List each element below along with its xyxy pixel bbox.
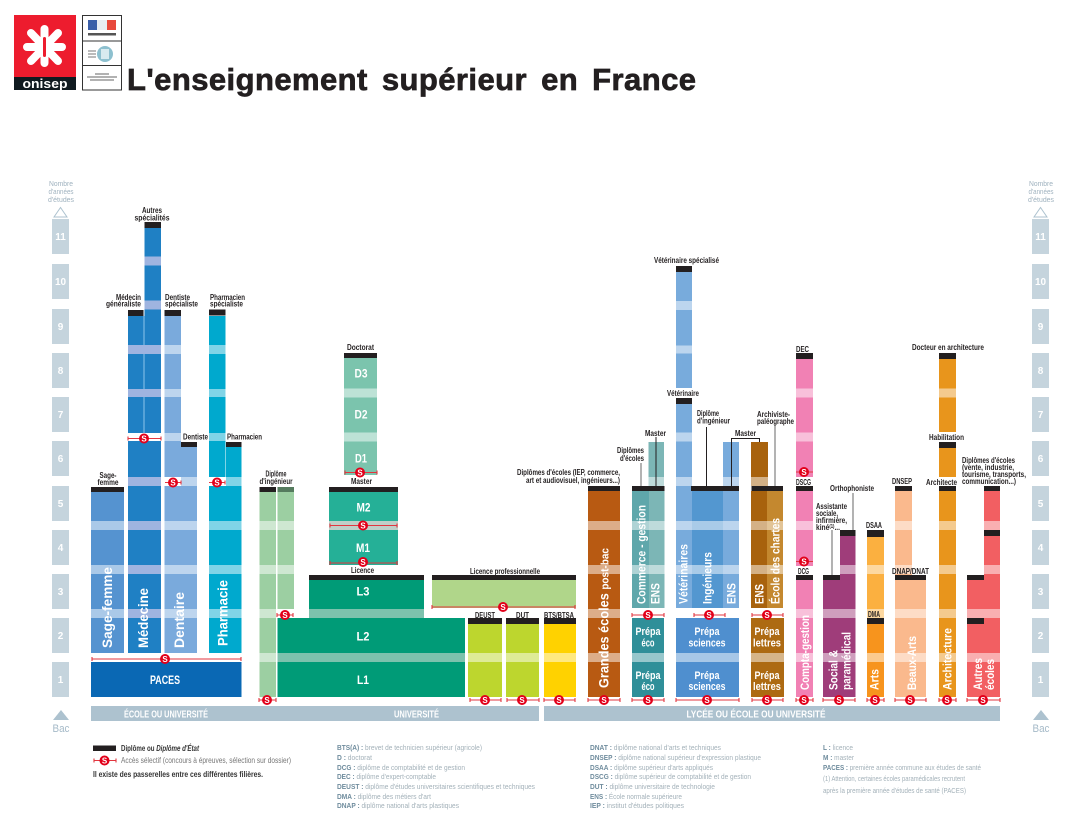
selective access markers: S [264,696,270,705]
glossary column 3: après la première année d'études de santé (PACES) [823,786,966,795]
right year scale: 1 [1038,675,1044,686]
selective access markers: S [801,558,807,566]
glossary column 1: DEUST : diplôme d'études universitaires scientifiques et techniques [337,782,535,791]
selective access markers: S [360,522,366,530]
glossary column 3 [823,743,981,795]
panel: lettres et chartes: Archiviste- [757,410,790,419]
selective access markers: S [872,696,878,705]
category bar: école ou université et université [91,706,539,721]
glossary column 1: DNAP : diplôme national d'arts plastiques [337,801,459,810]
panel: commerce-gestion [617,429,666,608]
selective access markers: S [214,478,220,488]
panel: commerce-gestion: Master [645,429,666,438]
panel: PACES: PACES [150,673,180,687]
panel: commerce-gestion: d'écoles [620,454,644,463]
panel: sage-femme: Sage- [100,471,117,480]
panel: autres écoles: écoles [983,659,997,690]
glossary column 3: (1) Attention, certaines écoles paramédicales recrutent [823,774,966,783]
selective access markers: S [645,611,651,620]
selective access markers: S [500,603,506,612]
panel: diplôme d'ingénieur (université): Diplôme [266,470,287,478]
panel: licence: L2 [356,630,370,644]
panel: social et paramédical: paramédical [840,632,854,690]
panel: social et paramédical [816,484,874,697]
selective access markers: S [282,611,288,620]
glossary column 1 [337,743,535,810]
panel: ingénieurs: ENS [724,583,738,604]
panel: dentaire [164,293,208,653]
panel: médecine: Autres [142,206,162,215]
panel: grandes écoles [517,468,620,697]
glossary column 2: ENS : École normale supérieure [590,792,682,801]
panel: prépa éco: éco [642,681,655,693]
selective access markers: S [360,558,366,567]
selective access markers: S [170,478,176,488]
left year scale: 11 [55,232,66,243]
panel: licence: L3 [356,584,370,598]
panel: autres écoles: tourisme, transports, [962,470,1026,479]
panel: diplôme d'ingénieur (université): d'ingénieur [260,477,292,486]
selective access markers: S [801,468,807,477]
panel: lettres et chartes: ENS [752,584,766,604]
panel: DUT [506,611,539,697]
panel: BTS/BTSA [544,611,576,697]
logo: onisep: onisep [22,76,68,91]
panel: compta-gestion [796,345,813,697]
panel: doctorat: D3 [354,366,368,380]
glossary column 1: DMA : diplôme des métiers d'art [337,792,432,801]
panel: beaux-arts: Beaux-Arts [905,636,919,690]
legend: Diplôme ou Diplôme d'État [121,744,199,753]
selective access markers: S [601,696,607,705]
left year scale: 7 [58,410,64,421]
selective access markers: S [704,696,710,705]
panel: autres écoles: communication...) [962,477,1016,486]
panel: beaux-arts [892,477,929,697]
legend [93,744,291,779]
panel: BTS/BTSA: BTS/BTSA [544,611,574,620]
left year scale: 1 [58,675,64,686]
panel: social et paramédical: ... [834,523,840,532]
panel: ingénieurs: Master [735,429,756,438]
panel: prépa éco: Prépa [636,626,661,638]
panel: licence: L1 [357,673,369,687]
panel: beaux-arts: DNAP/DNAT [892,567,929,576]
left year scale: 9 [58,322,64,333]
panel: lettres et chartes [751,410,794,608]
panel: architecture: Docteur en architecture [912,343,984,352]
panel: prépa sciences [676,618,739,697]
logo: onisep [14,15,76,91]
panel: ingénieurs: d'ingénieur [697,416,730,426]
panel: commerce-gestion: ENS [648,583,662,604]
panel: compta-gestion: DCG [798,567,809,576]
left year scale: 10 [55,277,66,288]
legend: Accès sélectif (concours à épreuves, sélection sur dossier) [121,756,291,765]
selective access markers: S [141,434,147,444]
panel: arts: DSAA [866,521,882,530]
category bar: lycée ou école ou université: LYCÉE OU ÉCOLE OU UNIVERSITÉ [686,708,826,720]
panel: médecine: spécialités [134,214,170,222]
selective access markers: S [645,696,651,705]
panel: licence [278,566,465,697]
right year scale: 10 [1035,277,1046,288]
panel: architecture: Architecte [926,478,957,487]
panel: doctorat: D1 [355,452,367,466]
panel: master [329,477,398,565]
glossary column 1: DEC : diplôme d'expert-comptable [337,772,436,781]
panel: vétérinaires: Vétérinaires [676,544,690,604]
panel: grandes écoles: art et audiovisuel, ingénieurs...) [526,476,620,485]
panel: dentaire: Dentaire [171,592,187,648]
panel: master: M1 [356,541,370,555]
panel: compta-gestion: DEC [796,345,809,354]
panel: dentaire: Dentiste [165,293,190,302]
panel: prépa lettres: Prépa [754,626,780,638]
panel: arts [866,521,884,697]
panel: pharmacie: Pharmacien [210,293,245,302]
selective access markers: S [482,696,488,705]
panel: arts: Arts [868,669,882,690]
panel: licence professionnelle: Licence professionnelle [470,567,540,576]
glossary column 2: DNAT : diplôme national d'arts et techniques [590,743,721,752]
panel: autres écoles: (vente, industrie, [962,463,1014,472]
left year scale: 3 [58,587,64,598]
left year scale: 8 [58,366,64,377]
panel: lettres et chartes: École des chartes [768,518,782,604]
panel: doctorat [344,343,377,475]
panel: prépa éco: éco [642,638,655,650]
right year scale: 6 [1038,454,1044,465]
panel: autres écoles: Diplômes d'écoles [962,456,1015,465]
selective access markers: S [357,468,363,478]
glossary column 2: DUT : diplôme universitaire de technologie [590,782,715,791]
selective access markers: S [162,655,168,664]
right year scale: 8 [1038,366,1044,377]
panel: ingénieurs: Diplôme [697,409,719,418]
left year scale: Bac [52,723,70,735]
panel: licence: Licence [351,566,374,575]
panel: prépa lettres: lettres [753,681,781,693]
left year scale: Nombre [49,181,73,188]
left year scale: 2 [58,631,64,642]
panel: dentaire: Dentiste [183,432,208,442]
panel: pharmacie: Pharmacie [214,580,230,646]
panel: prépa éco: Prépa [636,670,661,682]
right year scale: 2 [1038,631,1044,642]
selective access markers: S [980,696,986,705]
panel: sage-femme: Sage-femme [99,567,115,648]
right year scale: Bac [1032,723,1050,735]
panel: pharmacie [209,293,262,653]
panel: grandes écoles: Diplômes d'écoles (IEP, commerce, [517,468,620,477]
panel: beaux-arts: DNSEP [892,477,912,486]
glossary column 1: BTS(A) : brevet de technicien supérieur (agricole) [337,743,482,752]
glossary column 2: DNSEP : diplôme national supérieur d'expression plastique [590,753,761,762]
left year scale: d'études [48,197,74,204]
panel: pharmacie: spécialiste [210,300,243,308]
selective access markers: S [801,696,807,705]
selective access markers: S [764,611,770,620]
selective access markers: S [706,611,712,620]
panel: PACES [91,662,242,697]
logo: ministère [82,16,122,90]
panel: social et paramédical: sociale, [816,509,838,518]
selective access markers: S [764,696,770,705]
left year scale: 6 [58,454,64,465]
right year scale: 4 [1038,543,1044,554]
panel: vétérinaires: Vétérinaire spécialisé [654,256,719,265]
legend: S [102,756,108,766]
panel: social et paramédical: infirmière, [816,516,847,525]
right year scale: 9 [1038,322,1044,333]
panel: social et paramédical: Social & [826,650,840,690]
panel: prépa sciences: Prépa [694,670,720,682]
right year scale: 5 [1038,499,1044,510]
left year scale: 4 [58,543,64,554]
right year scale: d'études [1028,197,1054,204]
panel: prépa sciences: sciences [688,681,726,693]
panel: social et paramédical: Assistante [816,502,847,511]
panel: grandes écoles: Grandes écoles post-bac [596,548,612,688]
panel: prépa sciences: sciences [688,638,726,650]
panel: médecine: Médecin [116,293,141,302]
panel: autres écoles [962,456,1026,697]
category bar: lycée ou école ou université [544,706,1000,721]
panel: prépa lettres [751,618,784,697]
panel: pharmacie: Pharmacien [227,432,262,442]
left year scale [48,181,74,735]
legend: Il existe des passerelles entre ces différentes filières. [93,770,263,779]
glossary column 2: IEP : institut d'études politiques [590,801,684,810]
glossary column 1: DCG : diplôme de comptabilité et de gestion [337,763,465,772]
panel: master: M2 [356,500,371,514]
glossary column 3: PACES : première année commune aux études de santé [823,763,981,772]
panel: vétérinaires [654,256,719,608]
panel: lettres et chartes: paléographe [757,417,794,426]
selective access markers: S [836,696,842,705]
panel: compta-gestion: DSCG [796,478,811,487]
panel: vétérinaires: Vétérinaire [667,389,699,398]
glossary column 3: L : licence [823,743,853,752]
panel: social et paramédical: kiné [816,523,832,532]
right year scale: 11 [1035,232,1046,243]
glossary column 2: DSAA : diplôme supérieur d'arts appliqués [590,763,713,772]
selective access markers: S [519,696,525,705]
panel: doctorat: Doctorat [347,343,374,352]
panel: médecine: Médecine [135,588,151,648]
panel: compta-gestion: Compta-gestion [798,615,812,690]
panel: architecture: Architecture [940,628,954,690]
panel: arts: DMA [868,610,880,619]
panel: commerce-gestion: Commerce - gestion [634,505,648,604]
panel: ingénieurs [691,409,760,608]
panel: prépa lettres: Prépa [754,670,780,682]
panel: architecture [912,343,984,697]
panel: médecine: généraliste [106,300,141,308]
selective access markers [92,434,1000,705]
panel: dentaire: spécialiste [165,300,198,308]
panel: architecture: Habilitation [929,433,964,442]
panel: sage-femme [91,471,124,653]
glossary column 2: DSCG : diplôme supérieur de comptabilité et de gestion [590,772,751,781]
panel: master: Master [351,477,372,486]
glossary column 1: D : doctorat [337,753,373,762]
glossary column 2 [590,743,761,810]
panel: commerce-gestion: Diplômes [617,446,644,455]
panel: autres écoles: Autres [971,658,985,690]
panel: social et paramédical: (1) [829,524,835,530]
category bar: école ou université et université: UNIVERSITÉ [394,708,439,720]
panel: prépa sciences: Prépa [694,626,720,638]
selective access markers: S [907,696,913,705]
panel: diplôme d'ingénieur (université) [260,470,294,697]
glossary column 3: M : master [823,753,854,762]
panel: DEUST [468,611,502,697]
selective access markers: S [944,696,950,705]
panel: prépa lettres: lettres [753,638,781,650]
panel: DEUST: DEUST [475,611,495,620]
panel: ingénieurs: Ingénieurs [700,552,714,604]
right year scale: d'années [1028,189,1054,196]
right year scale: Nombre [1029,181,1053,188]
left year scale: 5 [58,499,64,510]
panel: médecine [106,206,170,653]
category bar: école ou université et université: ÉCOLE OU UNIVERSITÉ [124,708,208,720]
panel: licence professionnelle [432,567,576,608]
panel: sage-femme: femme [98,478,119,487]
right year scale: 3 [1038,587,1044,598]
left year scale: d'années [48,189,74,196]
right year scale [1028,181,1054,735]
selective access markers: S [556,696,562,705]
panel: DUT: DUT [516,611,529,620]
title: L'enseignement supérieur en France [127,62,696,97]
panel: doctorat: D2 [354,408,368,422]
right year scale: 7 [1038,410,1044,421]
panel: social et paramédical: Orthophoniste [830,484,874,493]
panel: prépa éco [632,618,664,697]
